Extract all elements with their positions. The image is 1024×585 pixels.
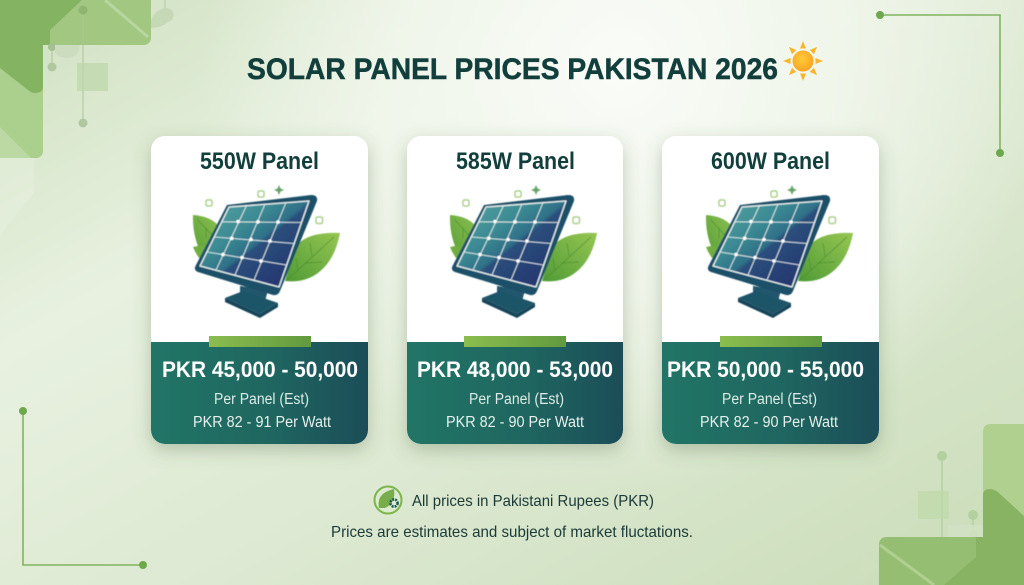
price band — [407, 342, 623, 444]
panel: 600W card — [662, 136, 879, 444]
icon: leaf and gear badge — [374, 486, 402, 514]
per watt price: PKR 82 - 90 Per Watt — [700, 414, 839, 431]
card heading: 600W Panel — [711, 148, 830, 175]
decoration: top-right connector line — [876, 11, 1004, 157]
decoration: bottom-left connector line — [19, 407, 147, 569]
footnote: currency: All prices in Pakistani Rupees (PKR) — [412, 493, 654, 510]
per watt price: PKR 82 - 91 Per Watt — [193, 414, 332, 431]
decoration: bottom-right green shapes — [858, 400, 1024, 585]
panel: 585W card — [407, 136, 623, 444]
card heading: 550W Panel — [200, 148, 319, 175]
price range: PKR 45,000 - 50,000 — [162, 357, 358, 382]
panel: 550W card — [151, 136, 368, 444]
per panel label: Per Panel (Est) — [722, 391, 817, 408]
price range: PKR 48,000 - 53,000 — [417, 357, 613, 382]
per panel label: Per Panel (Est) — [214, 391, 309, 408]
footnote: disclaimer: Prices are estimates and subject of market fluctations. — [331, 524, 693, 541]
accent tab — [720, 336, 822, 347]
title: SOLAR PANEL PRICES PAKISTAN 2026 — [247, 53, 778, 86]
card background — [151, 136, 368, 444]
accent tab — [464, 336, 566, 347]
price band — [662, 342, 879, 444]
card background — [407, 136, 623, 444]
icon: solar panel with leaves — [193, 185, 340, 318]
price band — [151, 342, 368, 444]
price range: PKR 50,000 - 55,000 — [667, 357, 864, 382]
icon: solar panel with leaves — [706, 185, 853, 318]
icon: sun — [783, 41, 823, 81]
icon: solar panel with leaves — [450, 185, 597, 318]
per watt price: PKR 82 - 90 Per Watt — [446, 414, 585, 431]
per panel label: Per Panel (Est) — [469, 391, 564, 408]
accent tab — [209, 336, 311, 347]
card background — [662, 136, 879, 444]
card heading: 585W Panel — [456, 148, 575, 175]
decoration: top-left green shapes — [0, 0, 174, 235]
